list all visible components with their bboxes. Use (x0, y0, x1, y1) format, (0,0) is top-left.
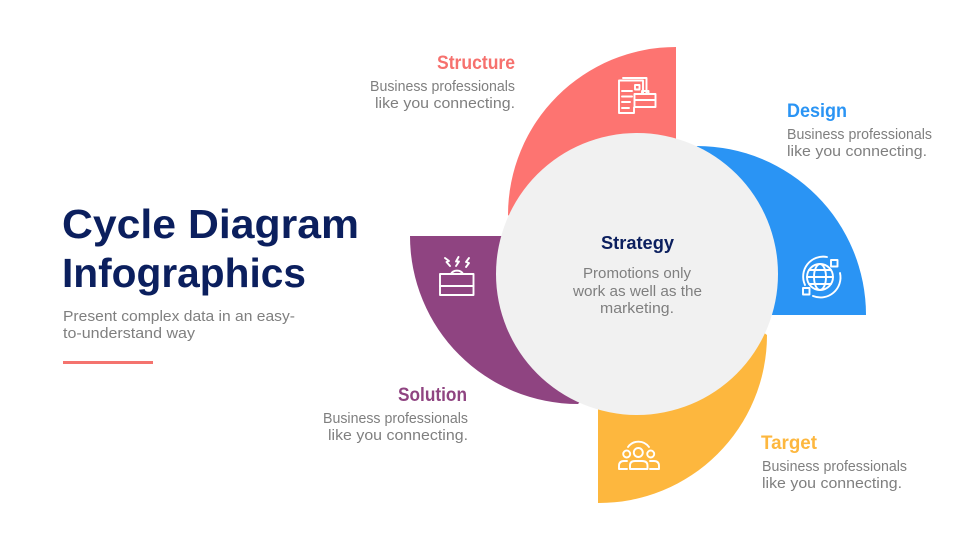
label: target (761, 433, 907, 492)
icon: group of people (619, 442, 659, 469)
center text: strategy: Strategy (601, 233, 674, 253)
icon: globe (803, 257, 841, 297)
label: target: Business professionals (762, 459, 907, 475)
center text: strategy (572, 233, 702, 317)
label: structure: Business professionals (370, 79, 515, 95)
segment: solution (410, 236, 600, 404)
label: design: like you connecting. (787, 144, 927, 160)
center text: strategy: work as well as the (572, 284, 702, 300)
title: Infographics (62, 250, 306, 296)
accent line (63, 361, 153, 364)
icon: document and card (619, 78, 656, 113)
center text: strategy: Promotions only (583, 266, 692, 282)
label: solution (323, 385, 468, 444)
center text: strategy: marketing. (600, 301, 674, 317)
subtitle (63, 308, 295, 342)
label: solution: Solution (398, 385, 467, 406)
label: structure: Structure (437, 53, 515, 74)
center circle (496, 133, 778, 415)
label: target: Target (761, 433, 818, 454)
title: Cycle Diagram (62, 201, 359, 247)
icon: briefcase with sparks (440, 257, 474, 295)
label: design: Business professionals (787, 127, 932, 143)
title (62, 201, 359, 296)
subtitle: to-understand way (63, 325, 196, 342)
label: design (787, 101, 932, 160)
segment: structure (508, 47, 676, 260)
label: target: like you connecting. (762, 476, 902, 492)
label: solution: Business professionals (323, 411, 468, 427)
subtitle: Present complex data in an easy- (63, 308, 295, 325)
label: structure: like you connecting. (375, 96, 515, 112)
label: solution: like you connecting. (328, 428, 468, 444)
label: design: Design (787, 101, 847, 122)
segment: target (598, 300, 767, 503)
segment: design (660, 146, 866, 315)
label: structure (370, 53, 515, 112)
